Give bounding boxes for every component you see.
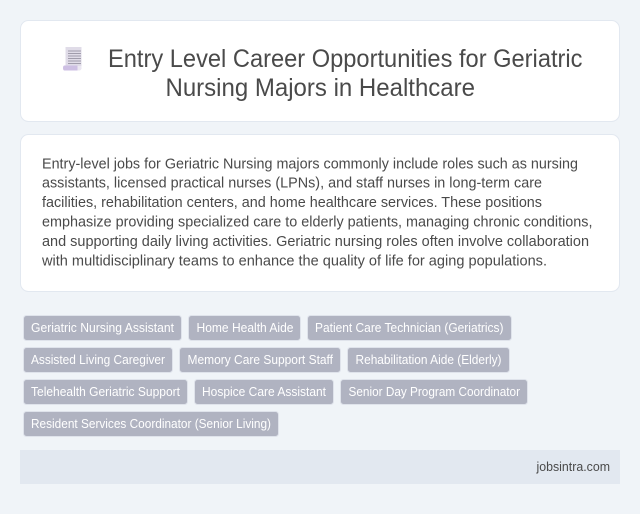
panel: description: [20, 134, 620, 292]
tag: Home Health Aide: Home Health Aide: [196, 320, 294, 335]
footer source text: jobsintra.com: [536, 459, 610, 474]
panel: header: [20, 20, 620, 122]
icon: document scroll: [63, 47, 82, 70]
description text: [41, 155, 592, 269]
tag: Home Health Aide: [188, 316, 300, 340]
footer: [20, 450, 620, 484]
title: [108, 45, 582, 102]
tag: Assisted Living Caregiver: Assisted Living Caregiver: [31, 352, 166, 367]
title: Nursing Majors in Healthcare: [166, 74, 475, 102]
description text: with multidisciplinary teams to enhance the quality of life for aging populations.: [41, 252, 547, 269]
description text: assistants, licensed practical nurses (LPNs), and staff nurses in long-term care: [42, 175, 542, 192]
description text: and supporting daily living activities. Geriatric nursing roles often involve collaboration: [42, 233, 589, 250]
tag: Senior Day Program Coordinator: [340, 380, 528, 404]
title: Entry Level Career Opportunities for Geriatric: [108, 45, 582, 73]
tag: Memory Care Support Staff: Memory Care Support Staff: [188, 352, 333, 367]
tag: Geriatric Nursing Assistant: Geriatric Nursing Assistant: [31, 320, 174, 335]
tag: Memory Care Support Staff: [180, 348, 340, 372]
description text: Entry-level jobs for Geriatric Nursing majors commonly include roles such as nursing: [42, 155, 578, 172]
description text: emphasize providing specialized care to elderly patients, managing chronic conditions,: [42, 214, 592, 230]
tag: Rehabilitation Aide: [348, 348, 510, 372]
tag list: [24, 316, 528, 436]
description text: facilities, rehabilitation centers, and home healthcare services. These positions: [42, 194, 542, 211]
tag: Geriatric Nursing Assistant: [24, 316, 182, 340]
tag: Telehealth Geriatric Support: Telehealth Geriatric Support: [31, 384, 180, 399]
tag: Assisted Living Caregiver: [24, 348, 172, 372]
tag: Senior Day Program Coordinator: Senior Day Program Coordinator: [348, 384, 521, 399]
tag: Hospice Care Assistant: [194, 380, 334, 404]
tag: Hospice Care Assistant: Hospice Care Assistant: [202, 384, 326, 399]
tag: Rehabilitation Aide: Rehabilitation Aide (Elderly): [356, 352, 502, 367]
tag: Patient Care Technician: Patient Care Technician (Geriatrics): [315, 320, 504, 335]
tag: Resident Services Coordinator: Resident Services Coordinator (Senior Living): [31, 416, 271, 431]
tag: Patient Care Technician: [308, 316, 512, 340]
tag: Telehealth Geriatric Support: [24, 380, 188, 404]
tag: Resident Services Coordinator: [24, 412, 278, 436]
